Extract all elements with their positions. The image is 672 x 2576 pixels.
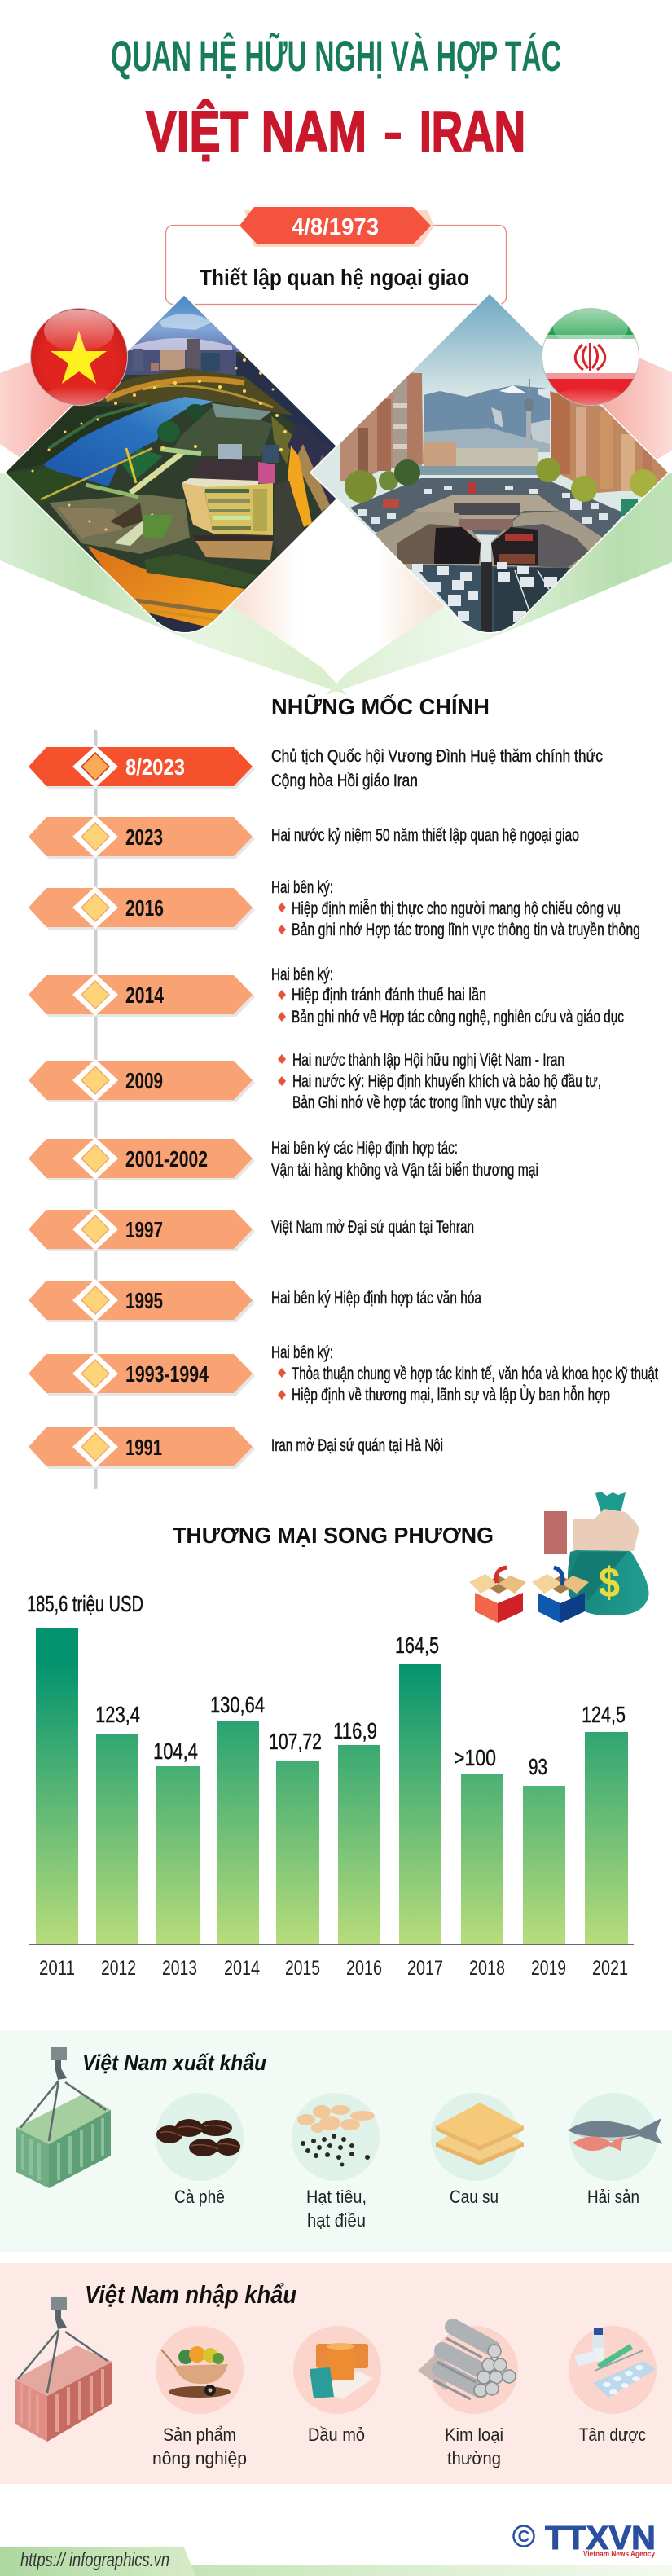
title: VIỆT NAM bbox=[146, 99, 367, 163]
product labels: Sản phẩm bbox=[163, 2424, 236, 2445]
title: IRAN bbox=[419, 99, 525, 163]
bar chart: 2016 bbox=[346, 1957, 382, 1980]
timeline: 2001-2002: 2001-2002 bbox=[125, 1146, 208, 1172]
product: pepper and cashew bbox=[292, 2093, 380, 2181]
timeline: 2016: Hai bên ký: bbox=[271, 878, 333, 897]
left buildings bbox=[340, 372, 424, 481]
footer logo: TTXVN: Vietnam News Agency bbox=[583, 2550, 655, 2559]
timeline: 1997 bbox=[29, 1208, 474, 1251]
timeline: 2001-2002: Hai bên ký các Hiệp định hợp tác: bbox=[271, 1139, 458, 1158]
product labels: Kim loại bbox=[445, 2424, 503, 2445]
timeline: 2014: Hiệp định tránh đánh thuế hai lần bbox=[292, 986, 486, 1004]
product labels: thường bbox=[447, 2448, 501, 2468]
product: petroleum bbox=[293, 2326, 381, 2414]
product: seafood bbox=[568, 2093, 662, 2181]
product labels bbox=[174, 2187, 639, 2231]
timeline: 2009: 2009 bbox=[125, 1068, 163, 1093]
icon: hand with money bag and boxes: $ bbox=[599, 1559, 620, 1607]
bar chart: 185,6 triệu USD bbox=[27, 1591, 143, 1616]
timeline: 2009 bbox=[29, 1051, 601, 1112]
product labels bbox=[152, 2424, 646, 2468]
bar chart: 123,4 bbox=[95, 1702, 140, 1727]
timeline: 2016: 2016 bbox=[125, 895, 164, 921]
timeline: 2001-2002 bbox=[29, 1137, 538, 1180]
timeline: 1991: Iran mở Đại sứ quán tại Hà Nội bbox=[271, 1436, 443, 1455]
bar chart: 104,4 bbox=[153, 1739, 198, 1764]
city lights bbox=[31, 358, 287, 531]
right buildings bbox=[550, 391, 668, 493]
product labels: Dầu mỏ bbox=[308, 2424, 365, 2445]
timeline: 1995: Hai bên ký Hiệp định hợp tác văn hóa bbox=[271, 1289, 481, 1308]
product: coffee bbox=[156, 2093, 244, 2181]
title: Việt Nam xuất khẩu bbox=[82, 2051, 266, 2075]
construction site bbox=[49, 495, 190, 554]
timeline: 1993-1994: Hai bên ký: bbox=[271, 1343, 333, 1362]
icon: red container bbox=[15, 2297, 112, 2442]
bar chart: 93 bbox=[529, 1754, 547, 1779]
orange road bbox=[87, 546, 244, 632]
traffic bbox=[350, 478, 625, 538]
mountains bbox=[424, 385, 550, 440]
title: - bbox=[383, 99, 403, 163]
bar chart: >100 bbox=[454, 1745, 496, 1770]
bar chart: 124,5 bbox=[582, 1702, 626, 1727]
big building bbox=[218, 444, 242, 460]
icon: green container bbox=[16, 2047, 111, 2188]
timeline: 8/2023: 8/2023 bbox=[125, 754, 185, 780]
product: base metals bbox=[418, 2326, 518, 2414]
timeline: 1995: 1995 bbox=[125, 1288, 163, 1313]
icon: hand with money bag and boxes bbox=[469, 1492, 649, 1623]
timeline: 1993-1994 bbox=[29, 1343, 658, 1404]
trees bbox=[345, 470, 377, 503]
bar chart: 2018 bbox=[469, 1957, 505, 1980]
product: rubber bbox=[431, 2093, 524, 2181]
timeline: 1993-1994: 1993-1994 bbox=[125, 1361, 209, 1387]
product labels: Cau su bbox=[450, 2187, 499, 2207]
lake bbox=[43, 397, 214, 486]
bar chart: 164,5 bbox=[395, 1633, 439, 1658]
timeline: 2023: Hai nước kỷ niệm 50 năm thiết lập quan hệ ngoại giao bbox=[271, 826, 579, 845]
product labels: Cà phê bbox=[174, 2187, 225, 2207]
lower road with cars bbox=[419, 565, 570, 632]
lower-left trees bbox=[6, 468, 81, 505]
timeline: 2001-2002: Vận tải hàng không và Vận tải biển thương mại bbox=[271, 1161, 538, 1180]
title bbox=[111, 31, 561, 163]
timeline axis bbox=[94, 730, 98, 1489]
section heading: bilateral trade: THƯƠNG MẠI SONG PHƯƠNG bbox=[173, 1523, 494, 1548]
timeline: 2023: 2023 bbox=[125, 824, 163, 850]
panel: Vietnam exports bbox=[0, 2030, 672, 2252]
photo: Hanoi bbox=[5, 296, 336, 634]
footer: website bbox=[0, 2547, 672, 2576]
bar chart: 2011 bbox=[39, 1957, 75, 1980]
timeline: 1997: 1997 bbox=[125, 1217, 163, 1242]
background ribbons bbox=[0, 326, 672, 695]
timeline: 1997: Việt Nam mở Đại sứ quán tại Tehran bbox=[271, 1218, 474, 1237]
bar chart: 2021 bbox=[592, 1957, 628, 1980]
footer logo: TTXVN: C bbox=[518, 2528, 529, 2546]
bar chart: 107,72 bbox=[269, 1729, 322, 1754]
timeline: 1991 bbox=[29, 1426, 443, 1469]
timeline: 8/2023 bbox=[29, 745, 603, 790]
panel: Vietnam imports bbox=[0, 2263, 672, 2484]
product labels: hạt điều bbox=[307, 2210, 366, 2231]
footer logo: TTXVN: TTXVN bbox=[545, 2519, 656, 2556]
left bank bbox=[6, 405, 152, 473]
timeline: 2009: Bản Ghi nhớ về hợp tác trong lĩnh vực thủy sản bbox=[292, 1093, 557, 1112]
callout: date of diplomatic relations: 4/8/1973 bbox=[292, 214, 379, 240]
right block and road bbox=[288, 426, 336, 510]
area right of lake bbox=[171, 407, 273, 456]
product labels: Tân dược bbox=[579, 2424, 646, 2445]
bar chart: 2013 bbox=[162, 1957, 197, 1980]
timeline: 2016 bbox=[29, 878, 640, 939]
bar chart bbox=[27, 1591, 634, 1980]
product labels: nông nghiệp bbox=[152, 2448, 247, 2468]
callout: date of diplomatic relations bbox=[166, 207, 507, 305]
tunnel bbox=[413, 495, 560, 519]
bar chart: 116,9 bbox=[333, 1718, 377, 1743]
timeline: 1995 bbox=[29, 1279, 481, 1322]
callout: date of diplomatic relations: Thiết lập quan hệ ngoại giao bbox=[200, 265, 469, 290]
product: pharmaceuticals bbox=[569, 2326, 657, 2414]
photo: Tehran bbox=[310, 293, 672, 644]
flag: Iran bbox=[542, 308, 639, 406]
bar chart: 2019 bbox=[531, 1957, 566, 1980]
timeline: 2023 bbox=[29, 815, 579, 859]
timeline: 2009: Hai nước thành lập Hội hữu nghị Việt Nam - Iran bbox=[292, 1051, 564, 1070]
product labels: Hải sản bbox=[587, 2187, 639, 2207]
bar chart: 130,64 bbox=[210, 1692, 265, 1717]
bar chart: 2014 bbox=[224, 1957, 260, 1980]
flag: Vietnam bbox=[30, 308, 128, 412]
bar chart: 2017 bbox=[407, 1957, 443, 1980]
timeline: 8/2023: Cộng hòa Hồi giáo Iran bbox=[271, 771, 418, 790]
overpass bbox=[417, 466, 538, 475]
timeline: 2014 bbox=[29, 965, 624, 1026]
title: Việt Nam nhập khẩu bbox=[85, 2280, 296, 2309]
bar chart: 2012 bbox=[101, 1957, 136, 1980]
timeline: 2014: 2014 bbox=[125, 982, 164, 1008]
product: agricultural products bbox=[156, 2326, 244, 2414]
timeline: 8/2023: Chủ tịch Quốc hội Vương Đình Huệ thăm chính thức bbox=[271, 747, 603, 766]
timeline: 2014: Hai bên ký: bbox=[271, 965, 333, 984]
bar chart: 2015 bbox=[285, 1957, 320, 1980]
footer: website: https:// infographics.vn bbox=[20, 2549, 169, 2571]
section heading: milestones: NHỮNG MỐC CHÍNH bbox=[271, 693, 490, 719]
product labels: Hạt tiêu, bbox=[306, 2187, 367, 2207]
timeline: 1991: 1991 bbox=[125, 1435, 162, 1460]
